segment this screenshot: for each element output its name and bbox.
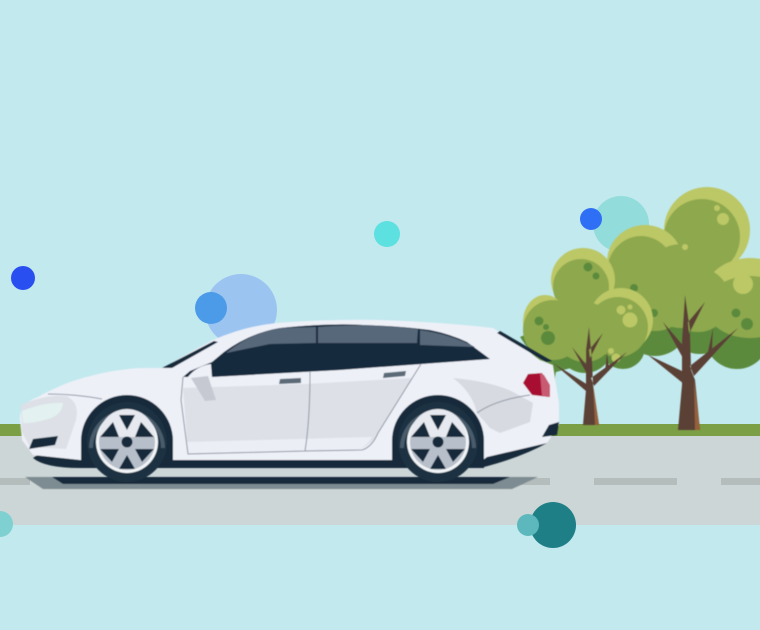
car door lines [48,364,530,454]
car rear vent [542,422,559,437]
large tree: right lobe [706,276,760,338]
road [0,436,760,525]
car tail light reflection [540,373,550,397]
car door panel shading [183,378,412,453]
car window glass [183,324,490,377]
decorative circle: bright blue by tree [580,208,602,230]
decorative circle: teal at left edge [0,511,13,537]
car wheel arches [81,395,173,468]
large tree: dark spots [630,284,753,330]
car rear spoiler line [497,331,552,362]
large tree: trunk and branches [648,295,738,430]
car mirror [187,364,212,378]
large tree: top lobe highlight [664,187,750,273]
car a-pillar line [162,341,218,368]
large tree: top lobe [664,199,740,275]
decorative circle: blue left [11,266,35,290]
decorative circle: cyan [374,221,400,247]
car headlight [22,403,63,423]
road dashes [0,478,760,485]
large tree: foliage [607,187,760,338]
small tree: dark spots [534,262,600,345]
large tree: centre foliage patch [666,268,730,332]
car tail light [523,373,549,397]
decorative circle: pale teal behind tree [593,196,649,252]
small tree [520,248,653,425]
large tree: dark foliage [607,259,760,369]
small tree: left lobe [523,300,583,360]
large tree: left lobe highlight [607,225,683,299]
car front wheel [87,402,167,482]
car front fog vent [29,436,58,449]
large tree: trunk shading [694,380,700,430]
large tree [607,187,760,430]
car window upper tint [226,325,475,353]
car door handles [279,378,301,384]
car front bumper shading [21,396,77,449]
small tree: trunk shading [593,385,599,425]
small tree: left lobe highlight [523,295,567,349]
car [20,320,559,489]
car shadow [25,477,538,489]
car shadow core [52,477,510,484]
car mirror shadow [191,376,216,401]
large tree: left lobe and body [607,236,724,331]
small tree: trunk and branches [553,327,627,425]
decorative circle: light teal on road edge [517,514,539,536]
small tree: right lobe highlight [589,288,653,352]
car rear wheel [398,402,478,482]
large tree: light spots [682,205,753,294]
small tree: centre lobe [555,302,615,362]
small tree: right lobe [588,297,648,357]
decorative circle: pale blue behind car [205,274,277,346]
car underbody [33,440,547,468]
car rear panel shading [453,378,533,433]
decorative circle: dark teal on road edge [530,502,576,548]
grass strip [0,424,760,436]
large tree: right lobe highlight [704,258,760,332]
car body [20,320,559,460]
small tree: top lobe [553,259,609,315]
small tree: top lobe highlight [551,248,615,312]
decorative circle: mid blue behind car [195,292,227,324]
small tree: light spots [608,304,638,362]
car door sill highlight [186,437,372,453]
small tree: dark foliage [520,317,645,385]
